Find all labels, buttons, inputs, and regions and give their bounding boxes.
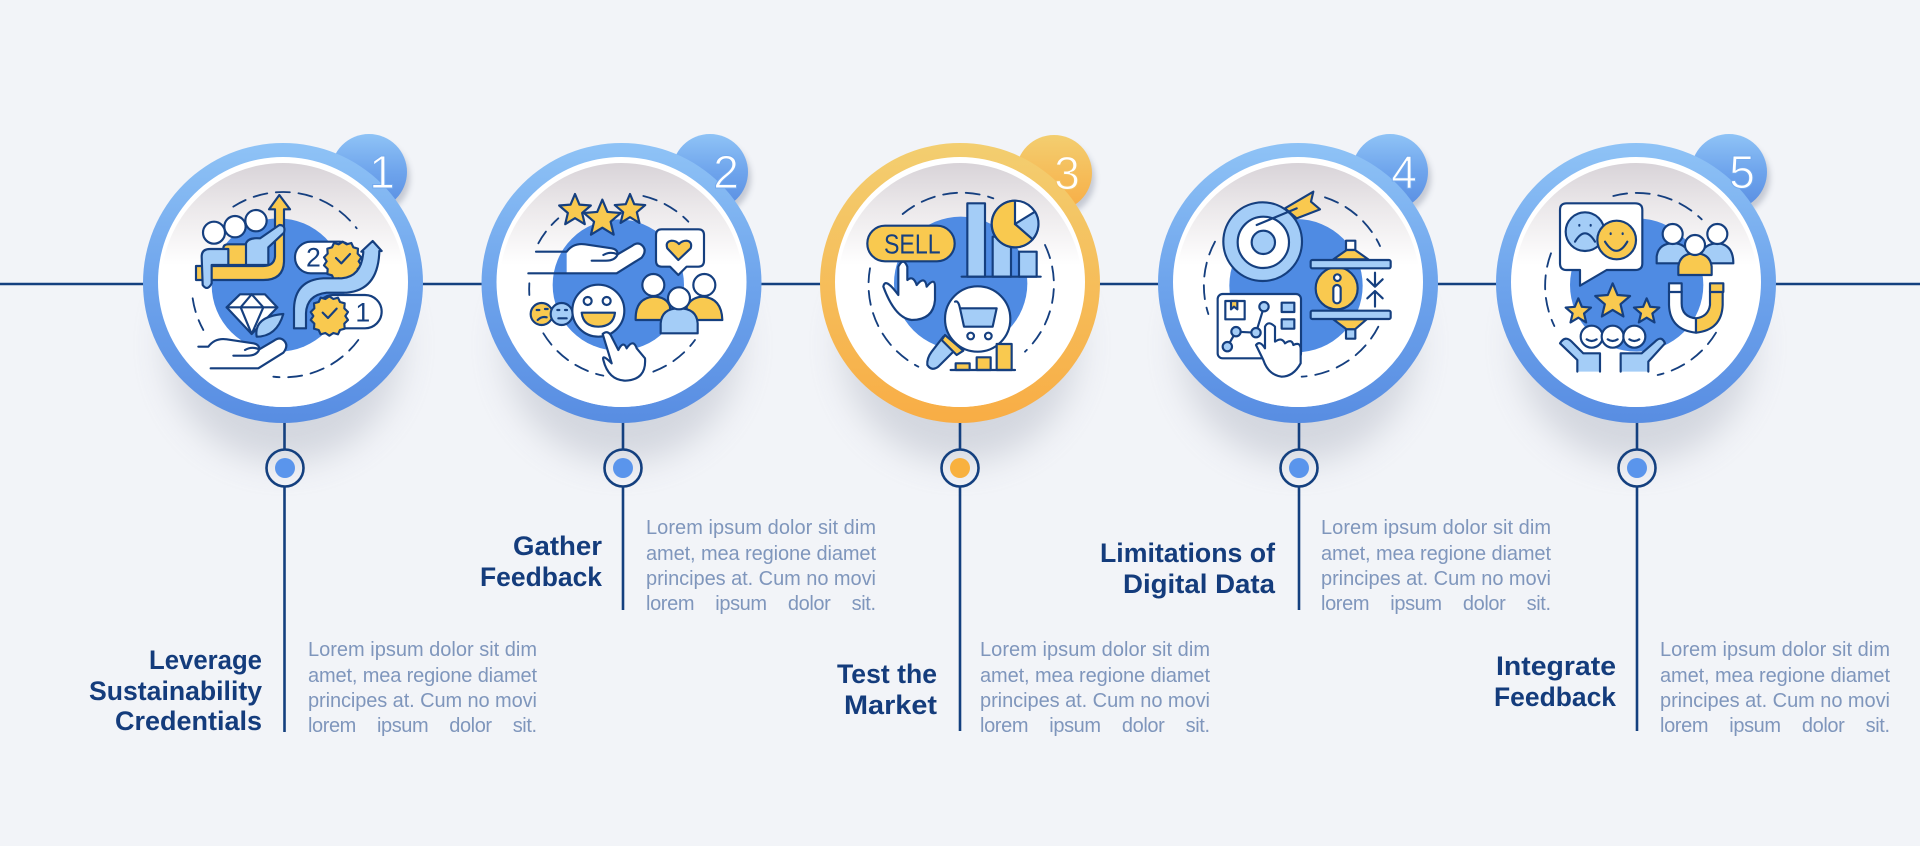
step 2 stem xyxy=(622,420,624,610)
step 5 body: lorem ipsum dolor sit. xyxy=(1660,715,1890,737)
step 3 body: principes at. Cum no movi xyxy=(980,690,1210,712)
step 3 number: 3 xyxy=(1054,147,1080,199)
step 5 icon xyxy=(1545,193,1733,375)
horizontal connector line xyxy=(0,283,1920,285)
step 3 node xyxy=(942,450,978,486)
step 1 node xyxy=(266,450,304,486)
step 1 number: 1 xyxy=(369,146,395,198)
step 3 icon: SELL xyxy=(884,228,941,259)
step 3 ring xyxy=(820,143,1100,423)
step 1 body: lorem ipsum dolor sit. xyxy=(308,715,537,737)
step 1 body: Lorem ipsum dolor sit dim xyxy=(308,639,537,661)
step 1 title xyxy=(89,645,262,736)
step 2 body: principes at. Cum no movi xyxy=(646,568,876,590)
step 2 body: lorem ipsum dolor sit. xyxy=(646,593,876,615)
step 4 inner disc xyxy=(1173,157,1423,407)
step 4 body: principes at. Cum no movi xyxy=(1321,568,1551,590)
step 4 title xyxy=(1100,538,1276,599)
step 2 number: 2 xyxy=(713,146,739,198)
step 4 title: Limitations of xyxy=(1100,538,1276,568)
step 1 title: Sustainability xyxy=(89,676,262,706)
step 3 number badge xyxy=(1016,135,1092,211)
step 3 title xyxy=(837,659,937,720)
step 3 icon xyxy=(867,193,1054,370)
step 1 icon xyxy=(193,192,382,377)
step 5 xyxy=(1494,134,1890,737)
step 3 stem xyxy=(959,420,961,731)
step 2 inner disc xyxy=(496,157,746,407)
step 3 body xyxy=(980,639,1210,737)
step 1 ring xyxy=(143,143,423,423)
step 2 icon xyxy=(528,194,722,381)
step 5 title: Integrate xyxy=(1496,651,1616,681)
step 5 body: Lorem ipsum dolor sit dim xyxy=(1660,639,1890,661)
step 1 title: Leverage xyxy=(149,645,262,675)
step 1 icon: 1 xyxy=(355,298,370,328)
step 2 xyxy=(480,134,876,615)
step 5 title: Feedback xyxy=(1494,682,1617,712)
step 4 xyxy=(1100,134,1551,615)
step 4 ring xyxy=(1158,143,1438,423)
step 2 node xyxy=(604,450,642,486)
step 2 ring xyxy=(482,143,762,423)
step 4 circle shadow xyxy=(1180,227,1416,463)
step 4 node xyxy=(1280,450,1318,486)
step 4 number badge xyxy=(1352,134,1428,210)
step 5 badge shadow xyxy=(1696,141,1770,215)
step 2 title: Gather xyxy=(513,531,602,561)
step 2 circle shadow xyxy=(504,227,740,463)
step 1 xyxy=(89,134,537,737)
step 5 inner disc xyxy=(1511,157,1761,407)
step 4 body: Lorem ipsum dolor sit dim xyxy=(1321,517,1551,539)
step 5 body: principes at. Cum no movi xyxy=(1660,690,1890,712)
step 1 circle shadow xyxy=(166,227,402,463)
step 5 circle shadow xyxy=(1518,227,1754,463)
step 1 inner disc xyxy=(158,157,408,407)
step 3 badge shadow xyxy=(1021,142,1095,216)
step 5 ring xyxy=(1496,143,1776,423)
step 1 badge shadow xyxy=(336,141,410,215)
step 1 icon: 2 xyxy=(306,243,321,273)
step 1 body: amet, mea regione diamet xyxy=(308,665,537,687)
step 4 title: Digital Data xyxy=(1123,569,1276,599)
step 2 title xyxy=(480,531,603,592)
step 2 body: amet, mea regione diamet xyxy=(646,543,876,565)
step 2 body: Lorem ipsum dolor sit dim xyxy=(646,517,876,539)
step 2 number badge xyxy=(672,134,748,210)
step 5 stem xyxy=(1636,420,1638,731)
step 3 body: Lorem ipsum dolor sit dim xyxy=(980,639,1210,661)
step 1 number badge xyxy=(331,134,407,210)
step 4 number: 4 xyxy=(1391,146,1417,198)
step 1 stem xyxy=(283,420,286,732)
step 4 stem xyxy=(1298,420,1300,610)
step 5 number badge xyxy=(1691,134,1767,210)
step 5 body xyxy=(1660,639,1890,737)
step 4 body: amet, mea regione diamet xyxy=(1321,543,1551,565)
step 2 body xyxy=(646,517,876,615)
step 3 xyxy=(820,135,1210,737)
step 2 title: Feedback xyxy=(480,562,603,592)
step 5 body: amet, mea regione diamet xyxy=(1660,665,1890,687)
step 4 body xyxy=(1321,517,1551,615)
step 5 title xyxy=(1494,651,1617,712)
step 4 icon xyxy=(1204,192,1391,377)
step 3 circle shadow xyxy=(842,227,1078,463)
step 5 number: 5 xyxy=(1729,146,1755,198)
step 3 body: amet, mea regione diamet xyxy=(980,665,1210,687)
step 3 title: Market xyxy=(844,690,937,720)
step 3 inner disc xyxy=(835,157,1085,407)
step 1 body: principes at. Cum no movi xyxy=(308,690,537,712)
step 4 badge shadow xyxy=(1357,141,1431,215)
step 1 title: Credentials xyxy=(115,706,262,736)
step 1 body xyxy=(308,639,537,737)
step 3 body: lorem ipsum dolor sit. xyxy=(980,715,1210,737)
step 4 body: lorem ipsum dolor sit. xyxy=(1321,593,1551,615)
step 3 title: Test the xyxy=(837,659,937,689)
step 2 badge shadow xyxy=(677,141,751,215)
step 5 node xyxy=(1618,450,1656,486)
